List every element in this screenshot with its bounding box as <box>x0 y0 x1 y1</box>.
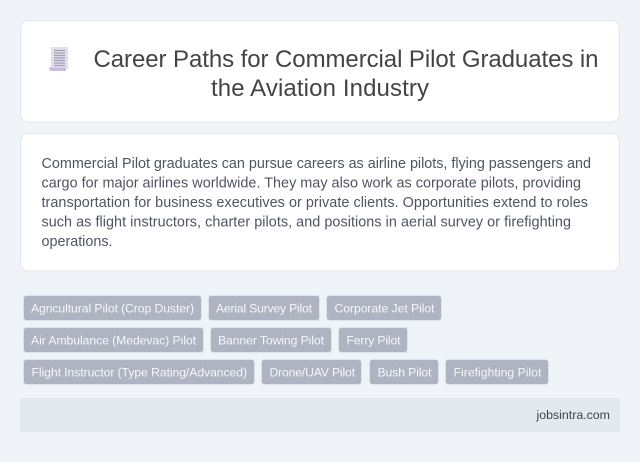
title: Career Paths for Commercial Pilot Graduates in <box>94 46 598 73</box>
text block: description: Commercial Pilot graduates can pursue careers as airline pilots, flying passengers and <box>42 156 591 172</box>
title: the Aviation Industry <box>211 75 429 102</box>
chip: Drone/UAV Pilot: Drone/UAV Pilot <box>270 366 356 380</box>
chip: Firefighting Pilot <box>446 360 548 384</box>
text block: description: transportation for business executives or private clients. Opportunities extend to roles <box>42 195 588 211</box>
footer source text: jobsintra.com <box>536 408 610 422</box>
chip: Aerial Survey Pilot <box>208 296 320 320</box>
chip: Bush Pilot: Bush Pilot <box>378 366 432 380</box>
chip: Corporate Jet Pilot: Corporate Jet Pilot <box>334 302 435 316</box>
chip: Agricultural Pilot <box>24 296 202 320</box>
chip: Ferry Pilot: Ferry Pilot <box>346 334 401 348</box>
chip group: career paths <box>24 296 548 384</box>
chip: Flight Instructor: Flight Instructor (Type Rating/Advanced) <box>32 366 247 380</box>
chip: Bush Pilot <box>370 360 438 384</box>
text block: description <box>42 156 591 250</box>
chip: Air Ambulance: Air Ambulance (Medevac) Pilot <box>31 334 197 348</box>
title <box>94 46 598 102</box>
chip: Air Ambulance <box>24 328 204 352</box>
text block: description: cargo for major airlines worldwide. They may also work as corporate pilots, providing <box>42 176 581 192</box>
panel: title card <box>20 20 620 122</box>
chip: Agricultural Pilot: Agricultural Pilot (Crop Duster) <box>31 302 194 316</box>
text block: description: such as flight instructors, charter pilots, and positions in aerial survey or firefighting <box>42 214 571 230</box>
chip: Banner Towing Pilot: Banner Towing Pilot <box>218 334 325 348</box>
chip: Drone/UAV Pilot <box>262 360 362 384</box>
chip: Banner Towing Pilot <box>210 328 332 352</box>
icon: document scroll <box>49 47 68 71</box>
chip: Ferry Pilot <box>338 328 408 352</box>
text block: description: operations. <box>42 234 112 250</box>
panel: description <box>20 134 620 271</box>
footer bar <box>20 398 620 432</box>
chip: Corporate Jet Pilot <box>326 296 442 320</box>
chip: Flight Instructor <box>24 360 254 384</box>
chip: Firefighting Pilot: Firefighting Pilot <box>454 366 542 380</box>
chip: Aerial Survey Pilot: Aerial Survey Pilot <box>216 302 313 316</box>
